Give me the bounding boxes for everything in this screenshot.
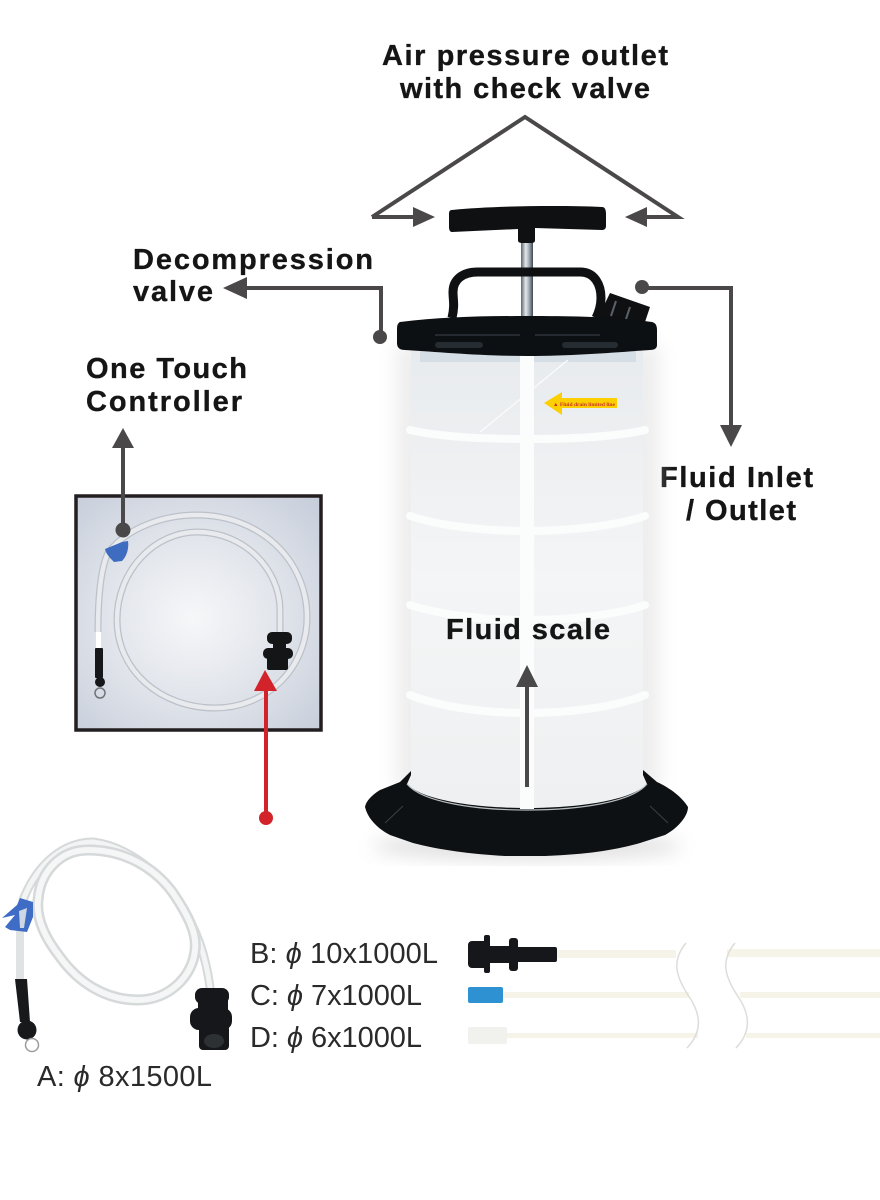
warning sticker: fluid drain limited line	[544, 392, 617, 415]
labels: hoses B C D	[250, 938, 438, 1054]
label: decompression valve: valve	[133, 276, 213, 308]
arrows: air pressure outlet	[372, 117, 678, 227]
connector C	[468, 987, 503, 1003]
stub end	[15, 979, 38, 1052]
labels: hoses B C D: B: ϕ 10x1000L	[250, 938, 438, 970]
black connector	[263, 632, 293, 670]
label: one touch controller: Controller	[86, 386, 242, 418]
clear hose	[20, 842, 210, 1000]
pump illustration	[365, 206, 688, 860]
fluid port	[597, 293, 650, 322]
title label: air pressure outlet	[382, 40, 668, 105]
arrow: decompression valve	[223, 277, 387, 344]
red arrow	[254, 670, 277, 825]
title label: air pressure outlet: with check valve	[399, 73, 650, 105]
pump soft shadow	[396, 345, 660, 790]
labels: hoses B C D: D: ϕ 6x1000L	[250, 1022, 422, 1054]
hose A	[2, 842, 232, 1052]
hose end stub	[95, 632, 105, 698]
blue clip	[105, 541, 128, 562]
label: decompression valve	[133, 244, 373, 308]
label: fluid inlet outlet: / Outlet	[686, 495, 796, 527]
panel: one touch controller hose	[76, 428, 321, 825]
label: fluid inlet outlet: Fluid Inlet	[660, 462, 813, 494]
black connector	[190, 988, 232, 1050]
label: one touch controller: One Touch	[86, 353, 247, 385]
blue clip	[2, 898, 33, 932]
label: fluid scale: Fluid scale	[446, 614, 610, 646]
pump reservoir body	[407, 350, 647, 810]
carry handle	[452, 272, 601, 318]
labels: hoses B C D: C: ϕ 7x1000L	[250, 980, 422, 1012]
dot and arrow: one touch controller	[112, 428, 134, 538]
label: decompression valve: Decompression	[133, 244, 373, 276]
break marks	[677, 943, 747, 1048]
connector D	[468, 1027, 507, 1044]
connector B	[468, 935, 557, 973]
lid	[397, 316, 657, 356]
label: fluid inlet outlet	[660, 462, 813, 527]
reinforcing rings	[410, 430, 645, 713]
arrow: fluid inlet outlet	[635, 280, 742, 447]
label: hose A: A: ϕ 8x1500L	[37, 1061, 212, 1093]
scale strip	[520, 352, 534, 809]
tube segments	[503, 949, 880, 1038]
label: one touch controller	[86, 353, 247, 418]
hose loop	[98, 515, 307, 708]
arrow: fluid scale	[516, 665, 538, 787]
title label: air pressure outlet: Air pressure outlet	[382, 40, 668, 72]
hoses B C D	[468, 935, 880, 1048]
pump rod	[521, 243, 533, 319]
T handle	[449, 206, 606, 243]
warning sticker: fluid drain limited line: ▲ Fluid drain limited line	[553, 402, 616, 408]
pump base	[365, 770, 688, 860]
